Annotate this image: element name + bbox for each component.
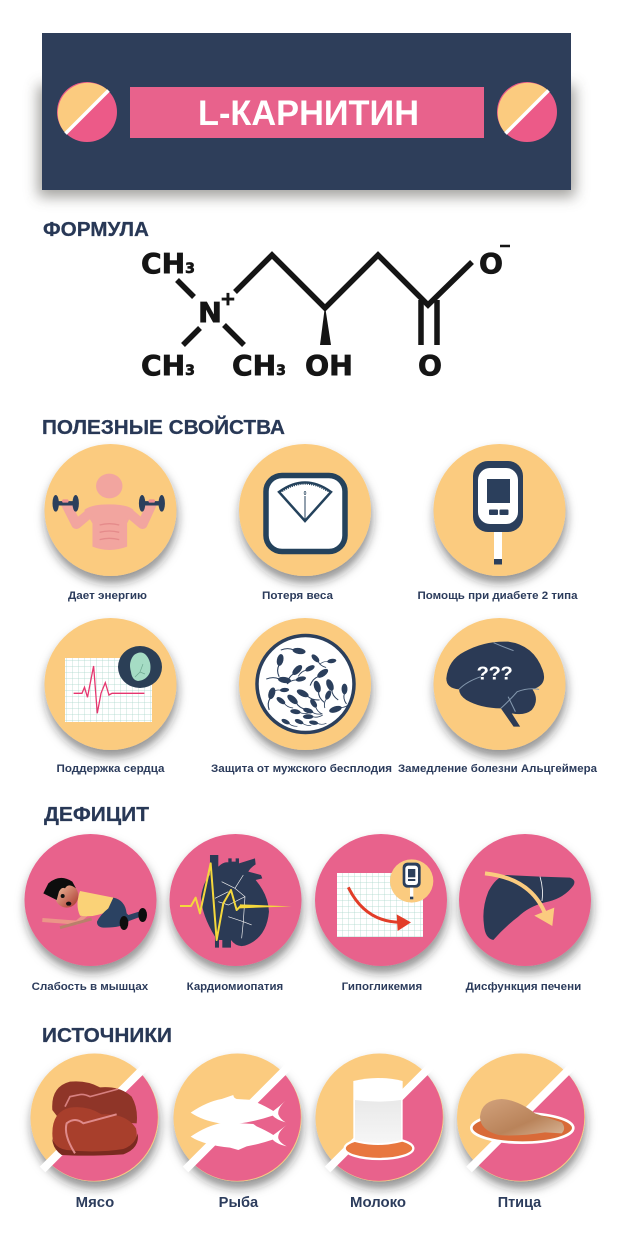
icon: heart ECG	[44, 618, 176, 750]
banner	[38, 33, 575, 197]
icon: hypoglycemia	[315, 834, 447, 966]
label: Мясо	[76, 1195, 114, 1211]
icon: meat	[30, 1054, 158, 1182]
label: Дисфункция печени	[466, 981, 581, 993]
label: Потеря веса	[262, 590, 334, 602]
label: Поддержка сердца	[56, 763, 165, 775]
label: Гипогликемия	[342, 981, 422, 993]
icon: poultry	[457, 1054, 585, 1182]
icon: cardiomyopathy	[170, 834, 302, 966]
label: Рыба	[219, 1195, 259, 1211]
chemical structure: CH3	[232, 349, 286, 382]
icon: liver	[459, 834, 591, 966]
heading: sources: ИСТОЧНИКИ	[42, 1025, 172, 1047]
label: Помощь при диабете 2 типа	[418, 590, 578, 602]
panel: benefits row 1	[44, 444, 578, 602]
label: Защита от мужского бесплодия	[211, 763, 392, 775]
panel: benefits row 2	[44, 618, 598, 775]
title bar	[130, 87, 484, 138]
icon: brain: ???	[477, 663, 513, 684]
icon: brain	[434, 618, 566, 750]
label: Дает энергию	[68, 590, 147, 602]
chemical structure: O	[418, 349, 442, 382]
label: Птица	[498, 1195, 542, 1211]
icon: right pill	[497, 82, 557, 142]
heading: deficiency: ДЕФИЦИТ	[44, 804, 149, 826]
heading: formula: ФОРМУЛА	[43, 219, 149, 241]
chemical structure: N	[198, 296, 222, 329]
panel: deficiency	[24, 834, 591, 993]
label: Замедление болезни Альцгеймера	[398, 763, 598, 775]
heading: benefits: ПОЛЕЗНЫЕ СВОЙСТВА	[42, 415, 285, 439]
panel: sources	[30, 1054, 585, 1211]
label: Слабость в мышцах	[32, 981, 149, 993]
chemical structure	[141, 246, 510, 382]
icon: fish	[174, 1054, 302, 1182]
chemical structure: CH3	[141, 247, 195, 280]
title: L-КАРНИТИН	[198, 94, 419, 133]
icon: scale	[239, 444, 371, 576]
chemical structure: O	[479, 247, 503, 280]
icon: muscle weakness	[24, 834, 156, 966]
icon: petri dish	[239, 618, 371, 750]
label: Молоко	[350, 1195, 406, 1211]
icon: energy	[44, 444, 176, 576]
chemical structure: CH3	[141, 349, 195, 382]
icon: milk	[316, 1054, 444, 1182]
icon: scale: 0	[304, 491, 307, 497]
icon: left pill	[57, 82, 117, 142]
chemical structure: +	[220, 288, 236, 310]
label: Кардиомиопатия	[187, 981, 283, 993]
icon: glucometer	[434, 444, 566, 576]
chemical structure: OH	[305, 349, 353, 382]
